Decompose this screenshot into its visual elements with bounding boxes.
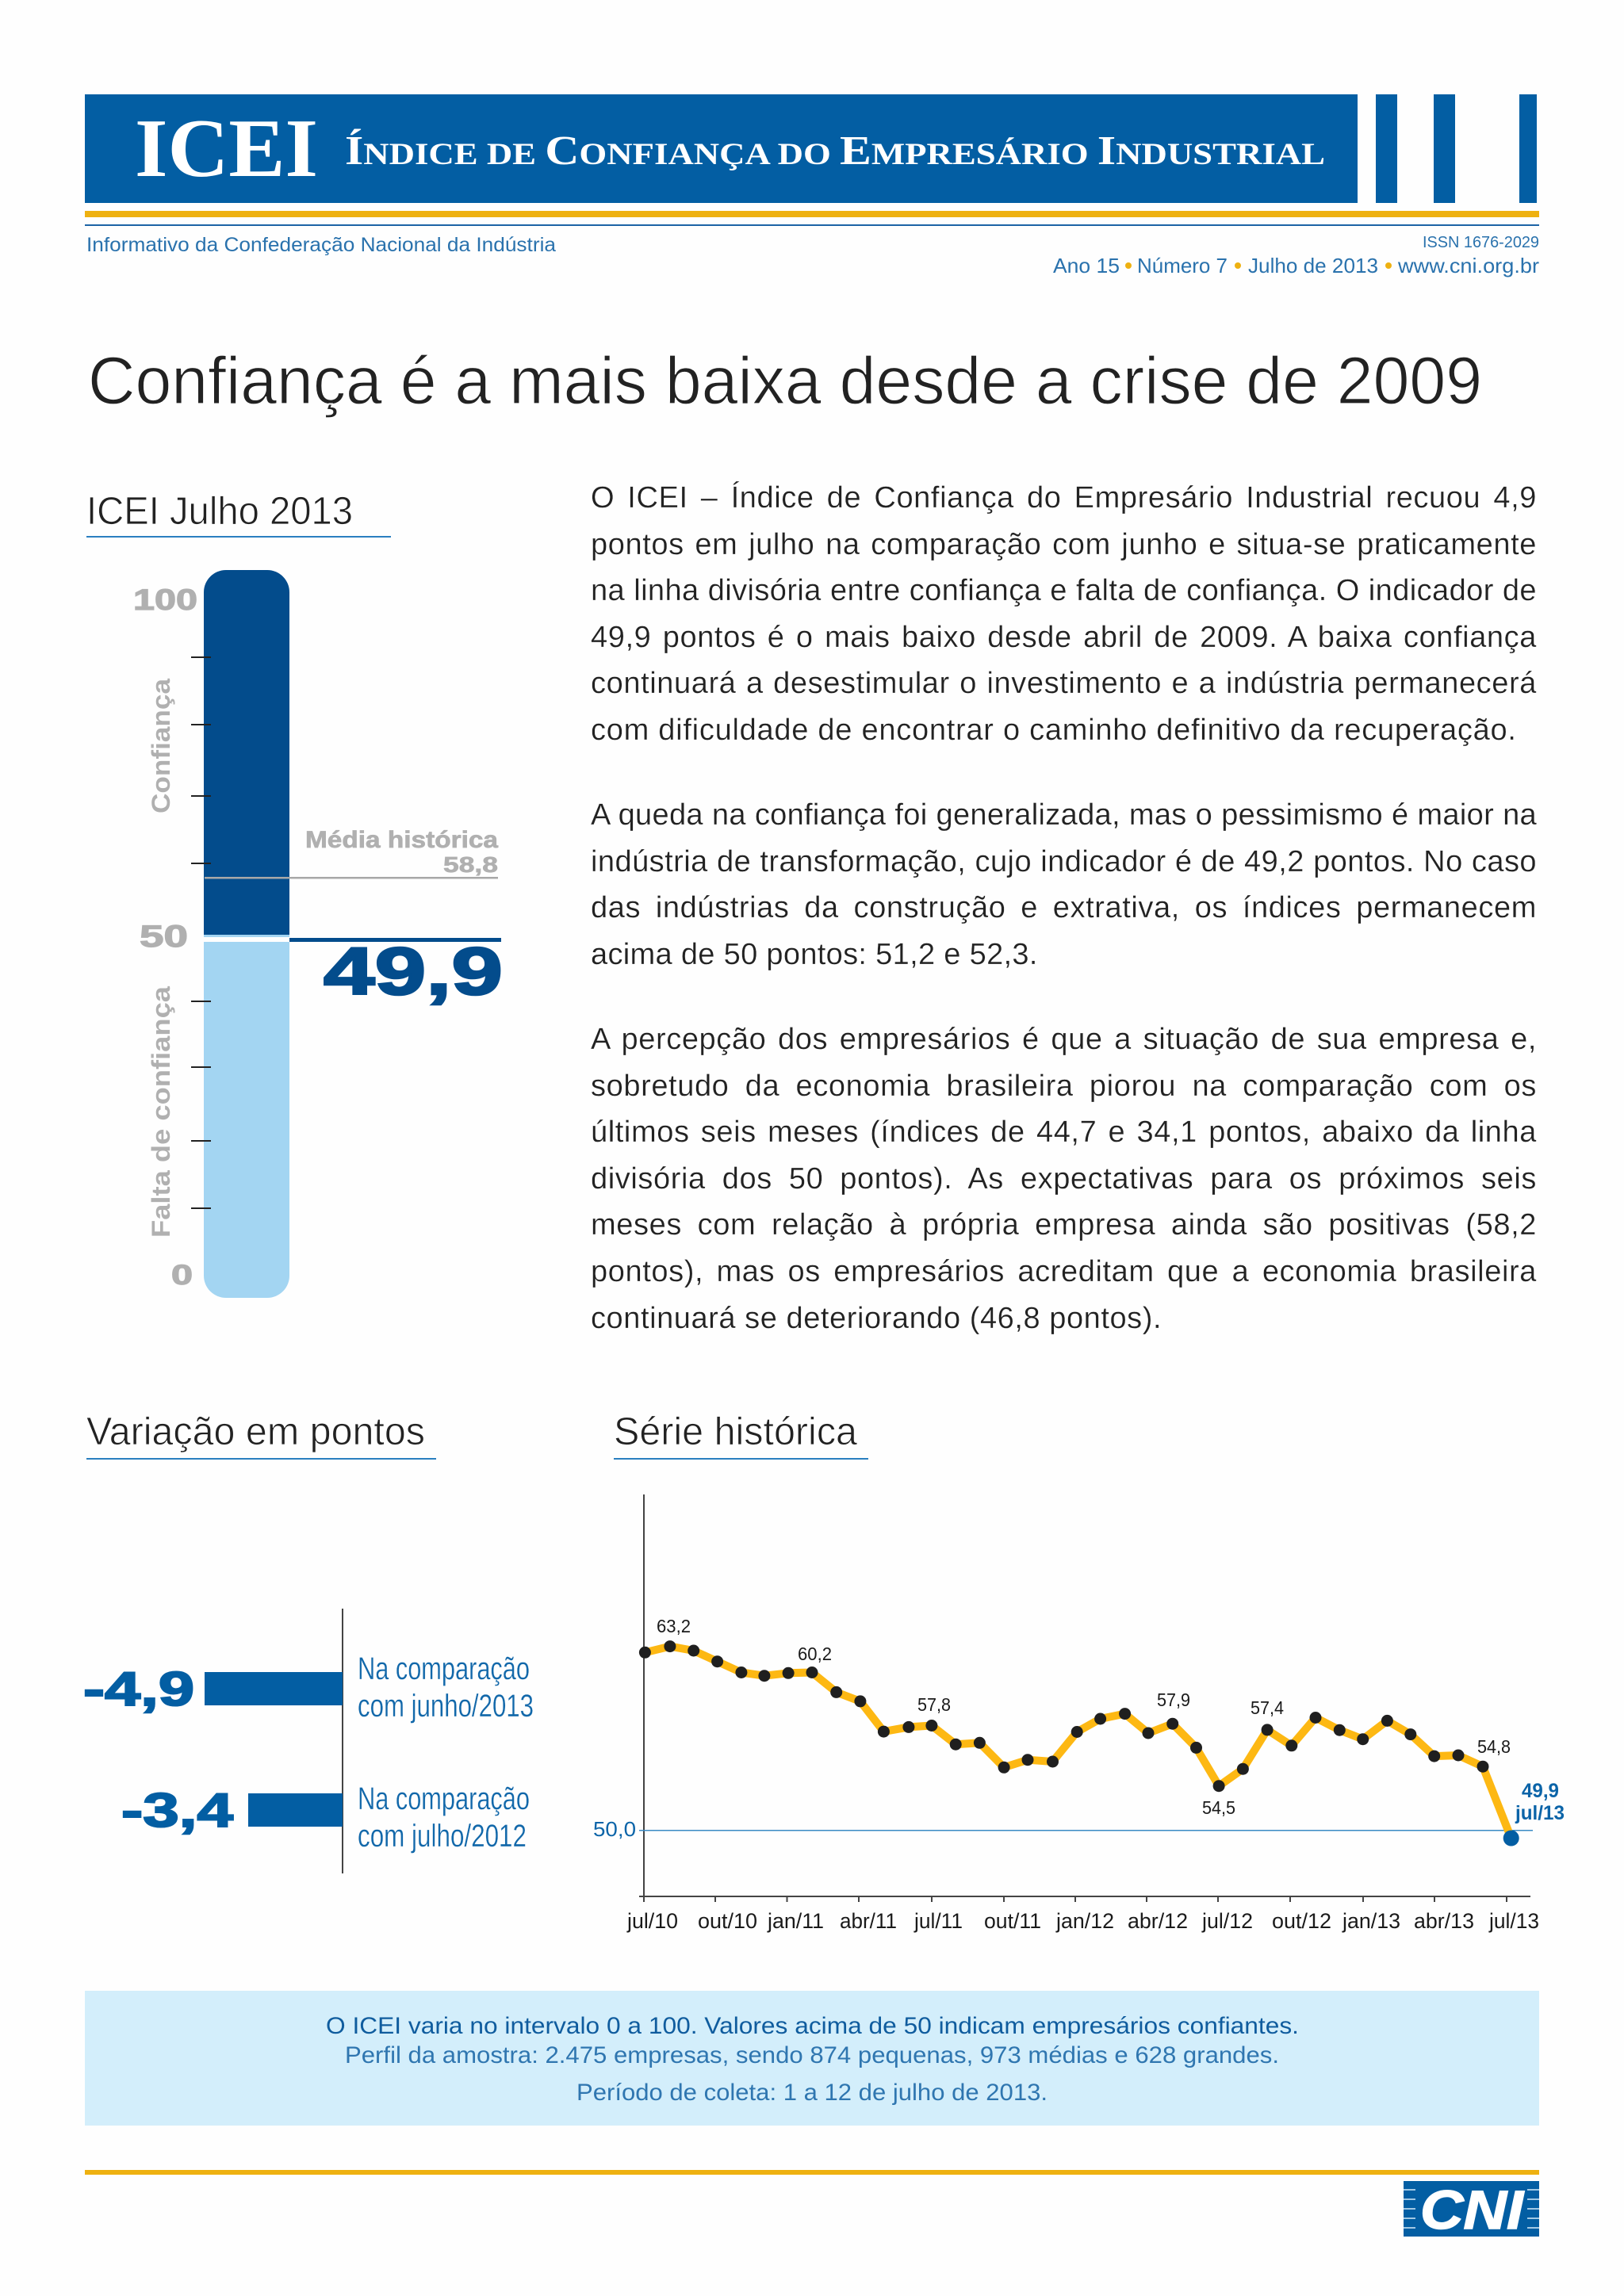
50 reference line: 50,0: [593, 1817, 636, 1841]
label: Falta de confiança: Falta de confiança: [147, 986, 175, 1238]
body paragraph 3: [591, 1023, 1537, 1335]
bar: June 2013 comparison: [83, 1651, 534, 1724]
historical average marker: [205, 827, 498, 878]
heading: Série histórica: Série histórica: [614, 1410, 858, 1453]
current value marker: 49,9: [324, 934, 503, 1008]
logo: CNI: CNI: [1420, 2179, 1525, 2241]
gauge chart: ICEI value: [133, 570, 503, 1298]
gauge ticks: [191, 657, 211, 1208]
body paragraph 2: [591, 798, 1537, 971]
issue information: www.cni.org.br: [1397, 254, 1539, 277]
value labels: 60,2: [798, 1644, 832, 1664]
info panel: O ICEI varia no intervalo 0 a 100. Valores acima de 50 indicam empresários confiantes.: [326, 2013, 1299, 2039]
x-axis labels: out/10: [698, 1909, 757, 1933]
issue information: Ano 15: [1053, 254, 1120, 277]
body paragraph 1: na linha divisória entre confiança e falta de confiança. O indicador de: [591, 574, 1537, 607]
bar: July 2012 comparison: com julho/2012: [358, 1819, 527, 1854]
value labels: 54,8: [1477, 1736, 1511, 1757]
chart axes: [639, 1494, 1530, 1902]
body paragraph 2: acima de 50 pontos: 51,2 e 52,3.: [591, 938, 1038, 971]
x-axis labels: abr/11: [840, 1909, 897, 1933]
header banner: ICEI: [135, 101, 318, 194]
header banner: [85, 94, 1537, 203]
label: Confiança: Confiança: [147, 679, 175, 813]
logo: CNI: [1404, 2179, 1539, 2241]
body paragraph 3: pontos), mas os empresários acreditam que a economia brasileira: [591, 1255, 1537, 1288]
x-axis labels: abr/13: [1414, 1909, 1474, 1933]
body paragraph 3: últimos seis meses (índices de 44,7 e 34,1 pontos, abaixo da linha: [591, 1115, 1537, 1149]
header rules: [85, 211, 1539, 226]
body paragraph 2: indústria de transformação, cujo indicador é de 49,2 pontos. No caso: [591, 845, 1537, 878]
bar: June 2013 comparison: Na comparação: [358, 1651, 530, 1686]
historical average marker: Média histórica: [305, 827, 498, 853]
info panel: Período de coleta: 1 a 12 de julho de 2013.: [576, 2080, 1048, 2106]
variation bar chart: [83, 1609, 534, 1873]
body paragraph 1: continuará a desestimular o investimento e a indústria permanecerá: [591, 667, 1537, 700]
x-axis labels: abr/12: [1128, 1909, 1188, 1933]
issue information: ISSN 1676-2029: [1423, 234, 1539, 251]
x-axis labels: jul/13: [1488, 1909, 1539, 1933]
gauge scale labels: 50: [140, 920, 188, 954]
bar: July 2012 comparison: [121, 1781, 530, 1854]
issue information: Número 7: [1137, 254, 1228, 277]
body paragraph 3: divisória dos 50 pontos). As expectativas para os próximos seis: [591, 1162, 1537, 1196]
x-axis labels: out/12: [1272, 1909, 1331, 1933]
gauge scale labels: [133, 584, 197, 1291]
body paragraph 1: [591, 481, 1537, 747]
body paragraph 3: A percepção dos empresários é que a situação de sua empresa e,: [591, 1023, 1537, 1056]
final data point: [1503, 1830, 1519, 1846]
body paragraph 1: O ICEI – Índice de Confiança do Empresário Industrial recuou 4,9: [591, 481, 1537, 515]
publisher line: Informativo da Confederação Nacional da Indústria: [86, 234, 556, 256]
gauge scale labels: 0: [171, 1260, 193, 1291]
value labels: 57,8: [917, 1694, 951, 1715]
x-axis labels: [626, 1909, 1539, 1933]
heading: ICEI Julho 2013: ICEI Julho 2013: [86, 490, 353, 533]
gauge scale labels: 100: [133, 584, 197, 616]
final value callout: [1515, 1780, 1565, 1824]
x-axis labels: jan/13: [1342, 1909, 1400, 1933]
bar: July 2012 comparison: Na comparação: [358, 1781, 530, 1816]
x-axis labels: jul/10: [626, 1909, 678, 1933]
final value callout: jul/13: [1515, 1802, 1565, 1824]
bar: June 2013 comparison: -4,9: [83, 1663, 194, 1716]
current value marker: [289, 934, 503, 1008]
data points: [639, 1640, 1489, 1792]
line chart: historical series: [593, 1494, 1565, 1933]
body paragraph 2: A queda na confiança foi generalizada, mas o pessimismo é maior na: [591, 798, 1537, 832]
issue information: [1053, 234, 1539, 277]
value labels: 57,4: [1251, 1697, 1284, 1718]
body paragraph 1: com dificuldade de encontrar o caminho definitivo da recuperação.: [591, 714, 1517, 747]
footer rule: [85, 2170, 1539, 2175]
bar: June 2013 comparison: com junho/2013: [358, 1689, 534, 1724]
x-axis labels: out/11: [984, 1909, 1041, 1933]
body paragraph 3: continuará se deteriorando (46,8 pontos).: [591, 1302, 1162, 1335]
final value callout: 49,9: [1522, 1780, 1559, 1802]
body paragraph 3: meses com relação à própria empresa ainda são positivas (58,2: [591, 1208, 1537, 1242]
historical average marker: 58,8: [443, 852, 498, 877]
issue information: Julho de 2013: [1248, 254, 1378, 277]
bar: July 2012 comparison: -3,4: [121, 1784, 234, 1837]
value labels: 57,9: [1157, 1689, 1190, 1710]
x-axis labels: jan/11: [767, 1909, 824, 1933]
body paragraph 1: 49,9 pontos é o mais baixo desde abril de 2009. A baixa confiança: [591, 621, 1537, 654]
data line: [645, 1647, 1511, 1838]
x-axis labels: jul/12: [1201, 1909, 1253, 1933]
body paragraph 1: pontos em julho na comparação com junho e situa-se praticamente: [591, 528, 1537, 561]
main title: Confiança é a mais baixa desde a crise de 2009: [88, 343, 1482, 418]
body paragraph 2: das indústrias da construção e extrativa, os índices permanecem: [591, 891, 1537, 924]
value labels: 63,2: [657, 1616, 691, 1636]
x-axis labels: jan/12: [1055, 1909, 1114, 1933]
x-axis labels: jul/11: [914, 1909, 963, 1933]
body paragraph 3: sobretudo da economia brasileira piorou na comparação com os: [591, 1070, 1537, 1103]
value labels: 54,5: [1202, 1797, 1235, 1818]
value labels: [657, 1616, 1511, 1818]
heading: Variação em pontos: Variação em pontos: [86, 1410, 425, 1453]
info panel: [85, 1991, 1539, 2126]
gauge bar: [204, 570, 289, 1298]
header banner: ÍNDICE DE CONFIANÇA DO EMPRESÁRIO INDUSTRIAL: [345, 128, 1325, 174]
info panel: Perfil da amostra: 2.475 empresas, sendo 874 pequenas, 973 médias e 628 grandes.: [345, 2042, 1279, 2068]
